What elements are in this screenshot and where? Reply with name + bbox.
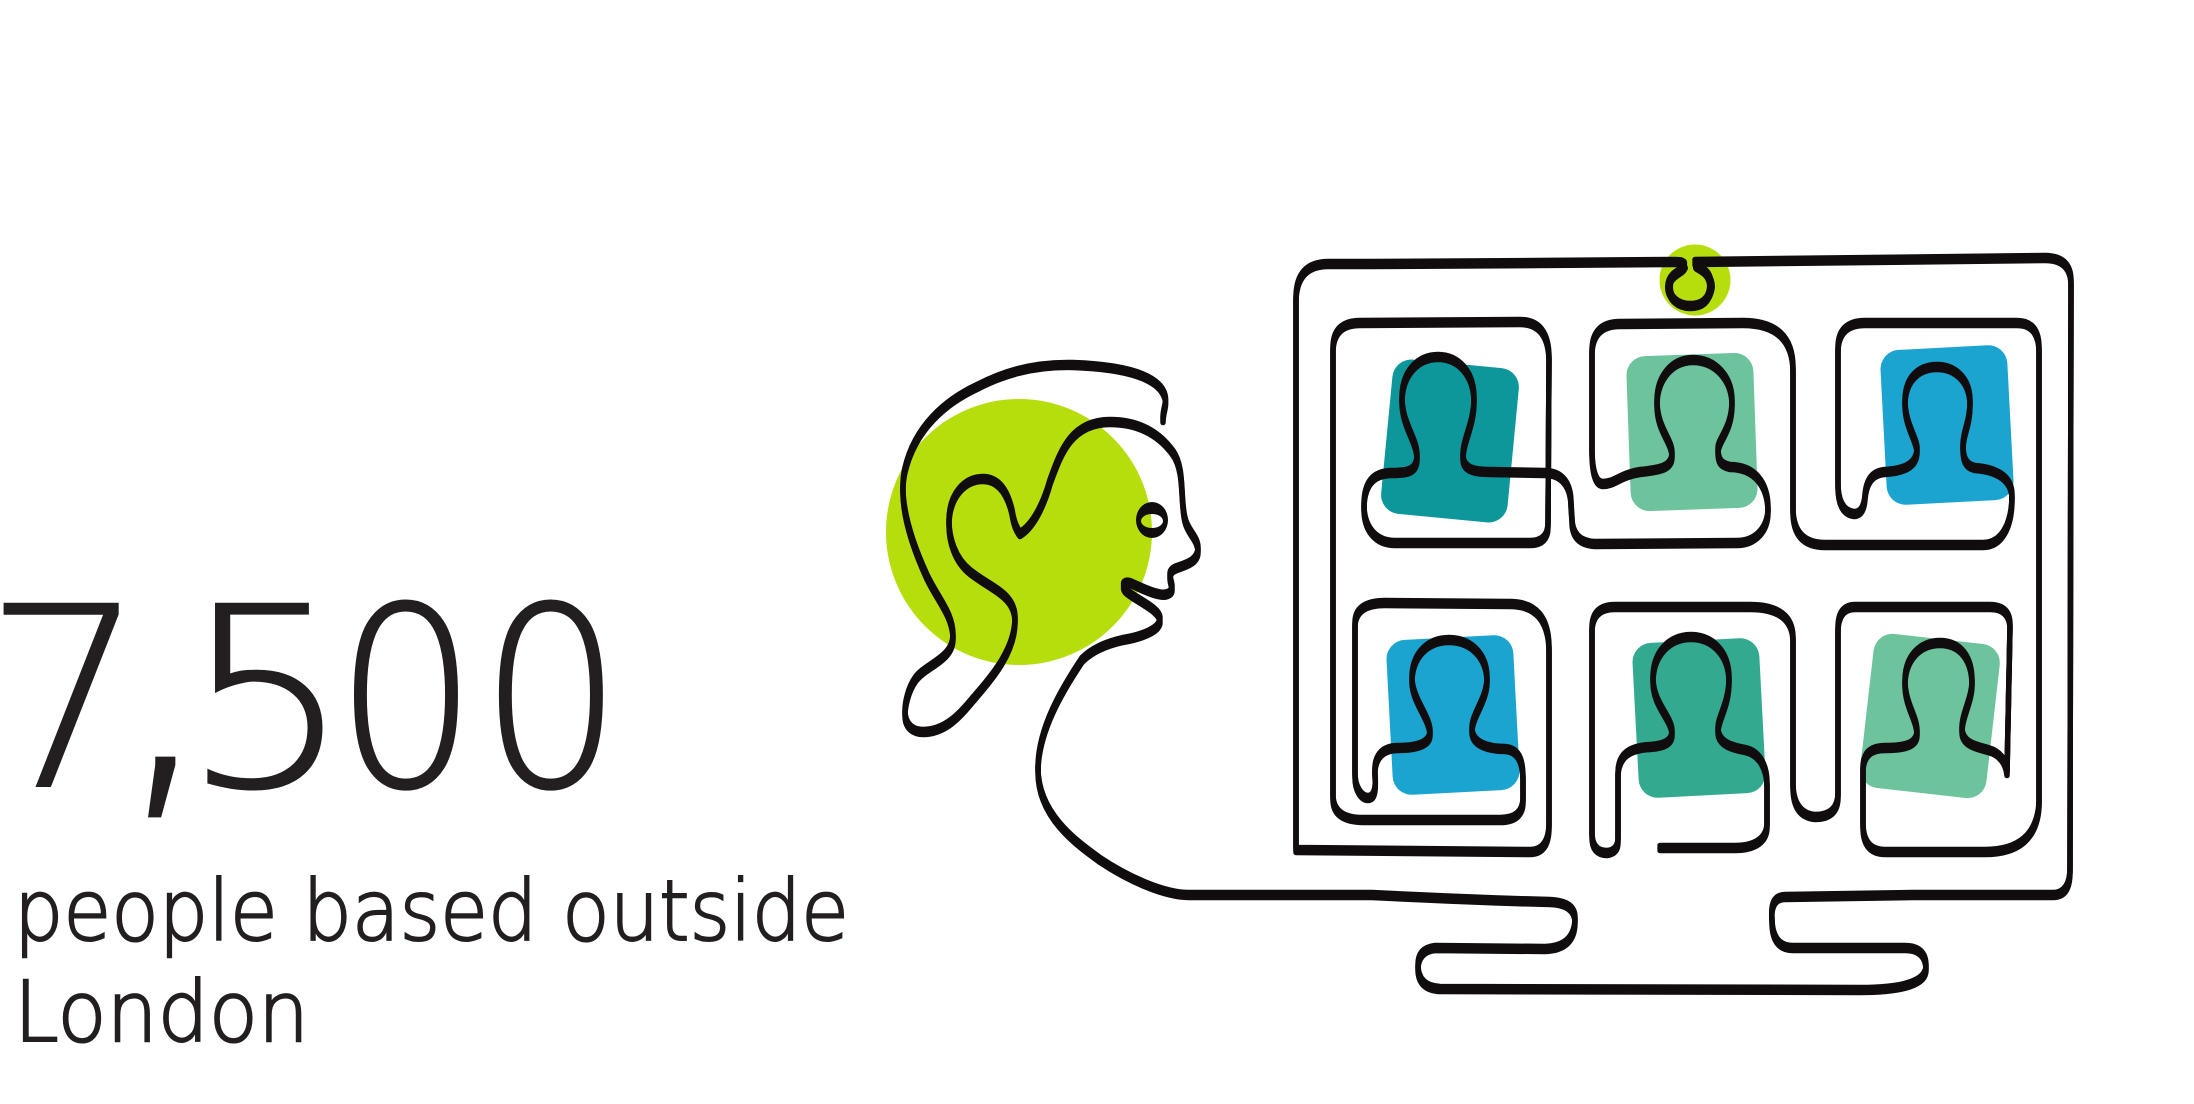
video tile 5: green-teal card xyxy=(1632,637,1766,799)
big number: 7,500 xyxy=(0,472,623,856)
webcam lime dot xyxy=(1660,244,1730,316)
video tile 2: light green card xyxy=(1626,352,1758,512)
big number: 7,500: 00 xyxy=(335,555,623,846)
icon: webcam ring xyxy=(1669,268,1711,306)
caption: people based outside London: London xyxy=(14,963,309,1061)
big number: 7,500: , xyxy=(108,472,223,856)
lime circle behind head xyxy=(886,399,1152,665)
icon: eye xyxy=(1136,502,1168,538)
video tile 1: teal card xyxy=(1379,358,1521,524)
caption: people based outside London: people based outside xyxy=(14,862,849,960)
caption: people based outside London xyxy=(14,862,849,1061)
continuous line drawing: head, monitor and six participants xyxy=(903,256,2071,992)
big number: 7,500: 5 xyxy=(182,554,351,845)
video tile 3: blue card xyxy=(1880,344,2014,506)
video tile 6: light green card xyxy=(1858,632,2002,800)
video tile 4: blue card xyxy=(1386,634,1520,796)
